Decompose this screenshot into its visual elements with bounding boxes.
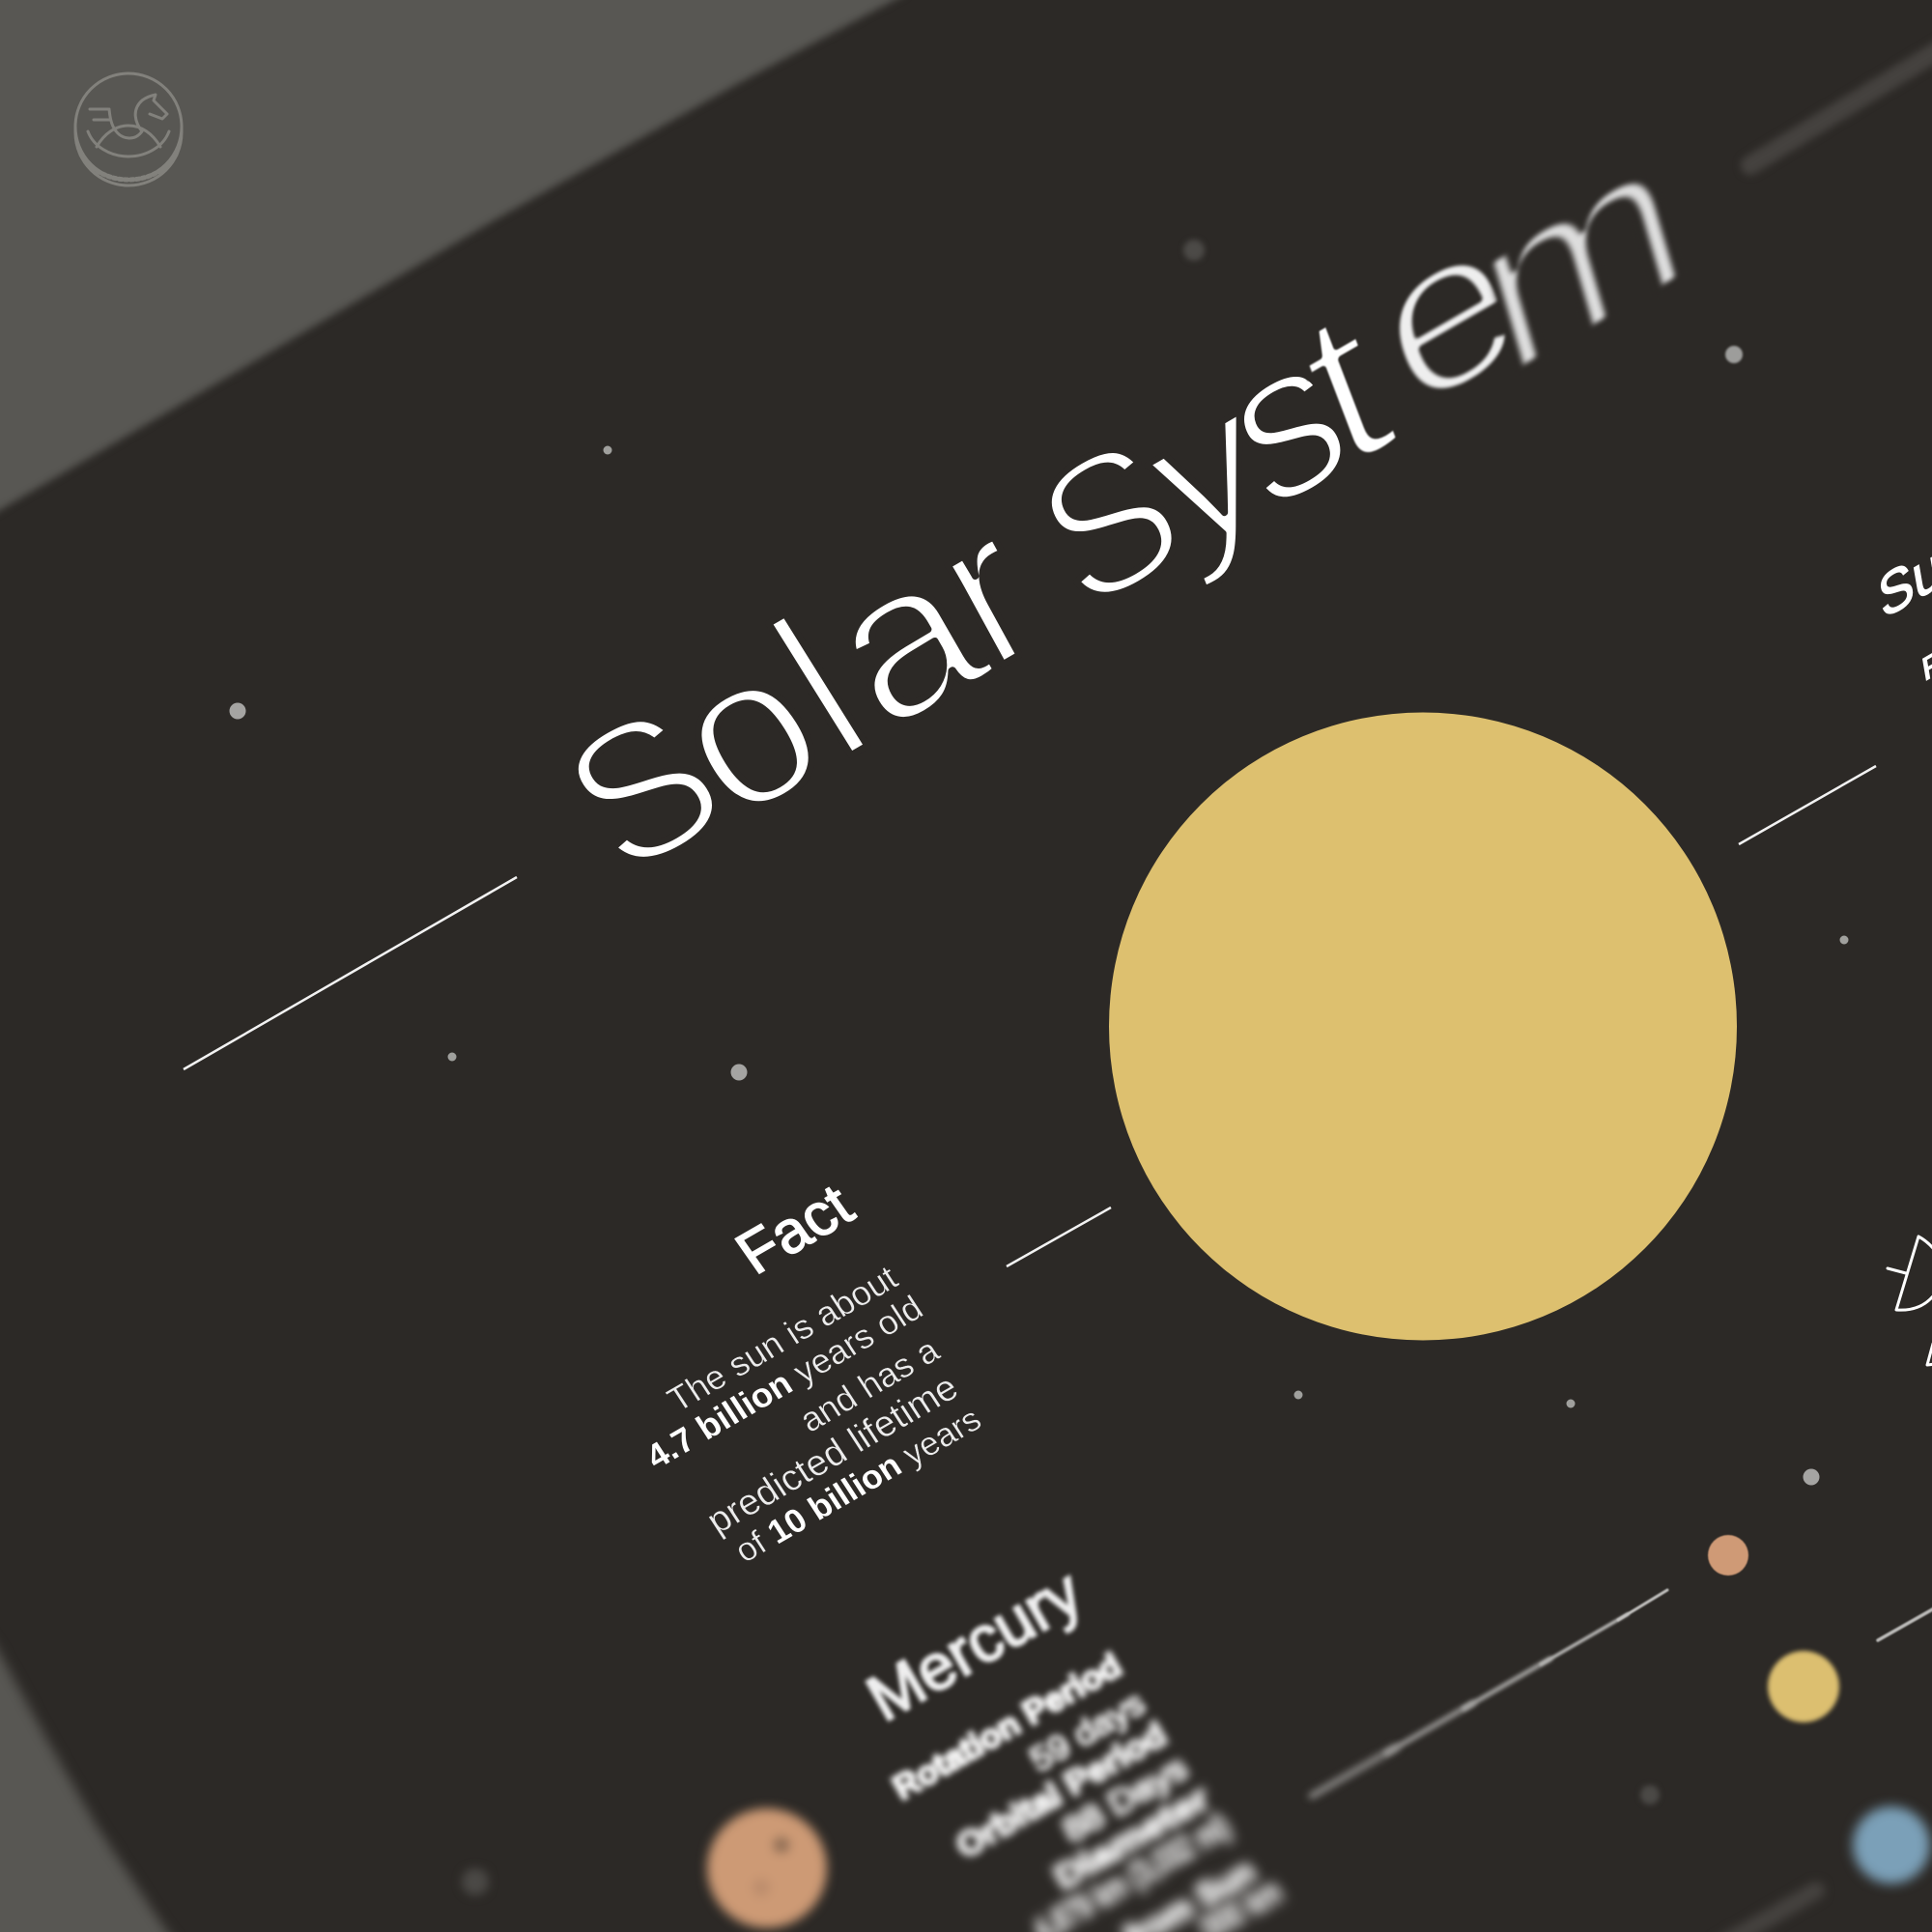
title: Solar System: m — [1451, 84, 1708, 423]
title: Solar System: l — [736, 575, 904, 802]
decorative line: top right blurred — [1750, 43, 1932, 165]
data rows: Mercury facts — [887, 1646, 1288, 1932]
title: Solar System: t — [1273, 257, 1418, 515]
text block: fact about the sun: and has a — [792, 1329, 947, 1439]
title: Solar System: r — [897, 467, 1074, 712]
title: Solar System: a — [786, 502, 1020, 775]
title: Solar System — [526, 84, 1708, 915]
line: fact to sun — [1007, 1208, 1111, 1266]
text block: fact about the sun: predicted lifetime — [699, 1367, 965, 1542]
text block: fact about the sun: The sun is about — [660, 1258, 904, 1419]
background: grey table bottom-left — [0, 1565, 213, 1932]
background: grey table top-left — [0, 0, 927, 544]
text block: fact about the sun: of 10 billion years — [728, 1401, 988, 1570]
orbit line: lower right — [1878, 1599, 1932, 1640]
icon: partial outline glyph at right edge — [1888, 1236, 1932, 1365]
data rows: Mercury facts: 59 days — [1024, 1684, 1151, 1779]
title: Solar System: y — [1121, 347, 1293, 594]
heading: Mercury: Mercury — [855, 1555, 1094, 1735]
orbit line: lower centre — [1312, 1590, 1667, 1796]
heading: Fact: Fact — [724, 1172, 866, 1287]
data rows: Mercury facts: 88 Days — [1057, 1748, 1194, 1850]
orbit line: bottom right blurred — [1719, 1890, 1816, 1932]
planet: blue — [1853, 1806, 1930, 1884]
title: Solar System: e — [1348, 162, 1545, 458]
data rows: Mercury facts: Rotation Period — [887, 1646, 1128, 1807]
planet: Mercury — [707, 1808, 827, 1928]
text block: fact about the sun — [639, 1258, 988, 1570]
sun — [1109, 713, 1737, 1341]
title: Solar System: S — [526, 664, 761, 915]
line: sun to stats — [1739, 766, 1876, 844]
planet: small orange — [1708, 1535, 1748, 1576]
decorative line: left of title — [184, 877, 517, 1069]
title: Solar System: o — [631, 601, 862, 864]
data rows: Mercury facts: Orbital Period — [950, 1716, 1173, 1865]
planet: yellow — [1768, 1651, 1839, 1722]
data rows: Mercury facts: Diameter — [1048, 1778, 1216, 1897]
title: Solar System: s — [1193, 283, 1377, 558]
title: Solar System: S — [1007, 394, 1212, 652]
text block: fact about the sun: 4.7 billion years old — [639, 1288, 929, 1476]
stars — [230, 240, 1849, 1895]
icon: rocking horse coin logo — [75, 73, 182, 185]
